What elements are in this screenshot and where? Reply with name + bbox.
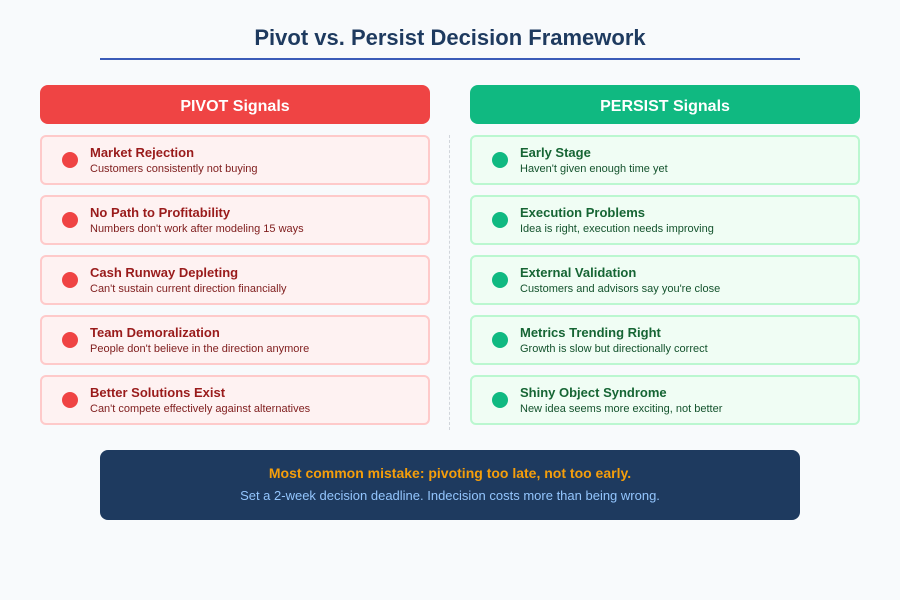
card: metrics trending bbox=[470, 315, 860, 365]
panel: pivot signals bbox=[40, 135, 430, 425]
title: Pivot vs. Persist Decision Framework bbox=[254, 25, 646, 50]
card: no path: Numbers don't work after modeling 15 ways bbox=[90, 223, 304, 235]
card: shiny object: Shiny Object Syndrome bbox=[520, 385, 667, 400]
card: cash runway: Cash Runway Depleting bbox=[90, 265, 238, 280]
card: no path bbox=[40, 195, 430, 245]
card: team demoralization: Team Demoralization bbox=[90, 325, 220, 340]
card: market rejection: Customers consistently not buying bbox=[90, 163, 258, 175]
card: metrics trending: Growth is slow but directionally correct bbox=[520, 343, 708, 355]
card: market rejection bbox=[40, 135, 430, 185]
callout: Most common mistake: pivoting too late, not too early. bbox=[269, 465, 631, 481]
card: early stage bbox=[470, 135, 860, 185]
card: market rejection: Market Rejection bbox=[90, 145, 194, 160]
header: pivot bbox=[40, 85, 430, 124]
card: team demoralization: People don't believe in the direction anymore bbox=[90, 343, 309, 355]
card: no path: No Path to Profitability bbox=[90, 205, 230, 220]
card: external validation: Customers and advisors say you're close bbox=[520, 283, 720, 295]
card: better solutions bbox=[40, 375, 430, 425]
card: early stage: Early Stage bbox=[520, 145, 591, 160]
callout bbox=[100, 450, 800, 520]
card: shiny object: New idea seems more exciting, not better bbox=[520, 403, 722, 415]
card: metrics trending: Metrics Trending Right bbox=[520, 325, 661, 340]
card: better solutions: Better Solutions Exist bbox=[90, 385, 225, 400]
header: pivot: PIVOT Signals bbox=[180, 98, 290, 115]
callout: Set a 2-week decision deadline. Indecision costs more than being wrong. bbox=[240, 488, 660, 503]
header: persist bbox=[470, 85, 860, 124]
card: execution problems: Execution Problems bbox=[520, 205, 645, 220]
card: shiny object bbox=[470, 375, 860, 425]
card: execution problems: Idea is right, execution needs improving bbox=[520, 223, 714, 235]
card: early stage: Haven't given enough time yet bbox=[520, 163, 668, 175]
card: external validation: External Validation bbox=[520, 265, 636, 280]
header: persist: PERSIST Signals bbox=[600, 98, 730, 115]
card: cash runway: Can't sustain current direction financially bbox=[90, 283, 287, 295]
card: external validation bbox=[470, 255, 860, 305]
card: better solutions: Can't compete effectively against alternatives bbox=[90, 403, 310, 415]
card: execution problems bbox=[470, 195, 860, 245]
panel: persist signals bbox=[470, 135, 860, 425]
card: cash runway bbox=[40, 255, 430, 305]
card: team demoralization bbox=[40, 315, 430, 365]
